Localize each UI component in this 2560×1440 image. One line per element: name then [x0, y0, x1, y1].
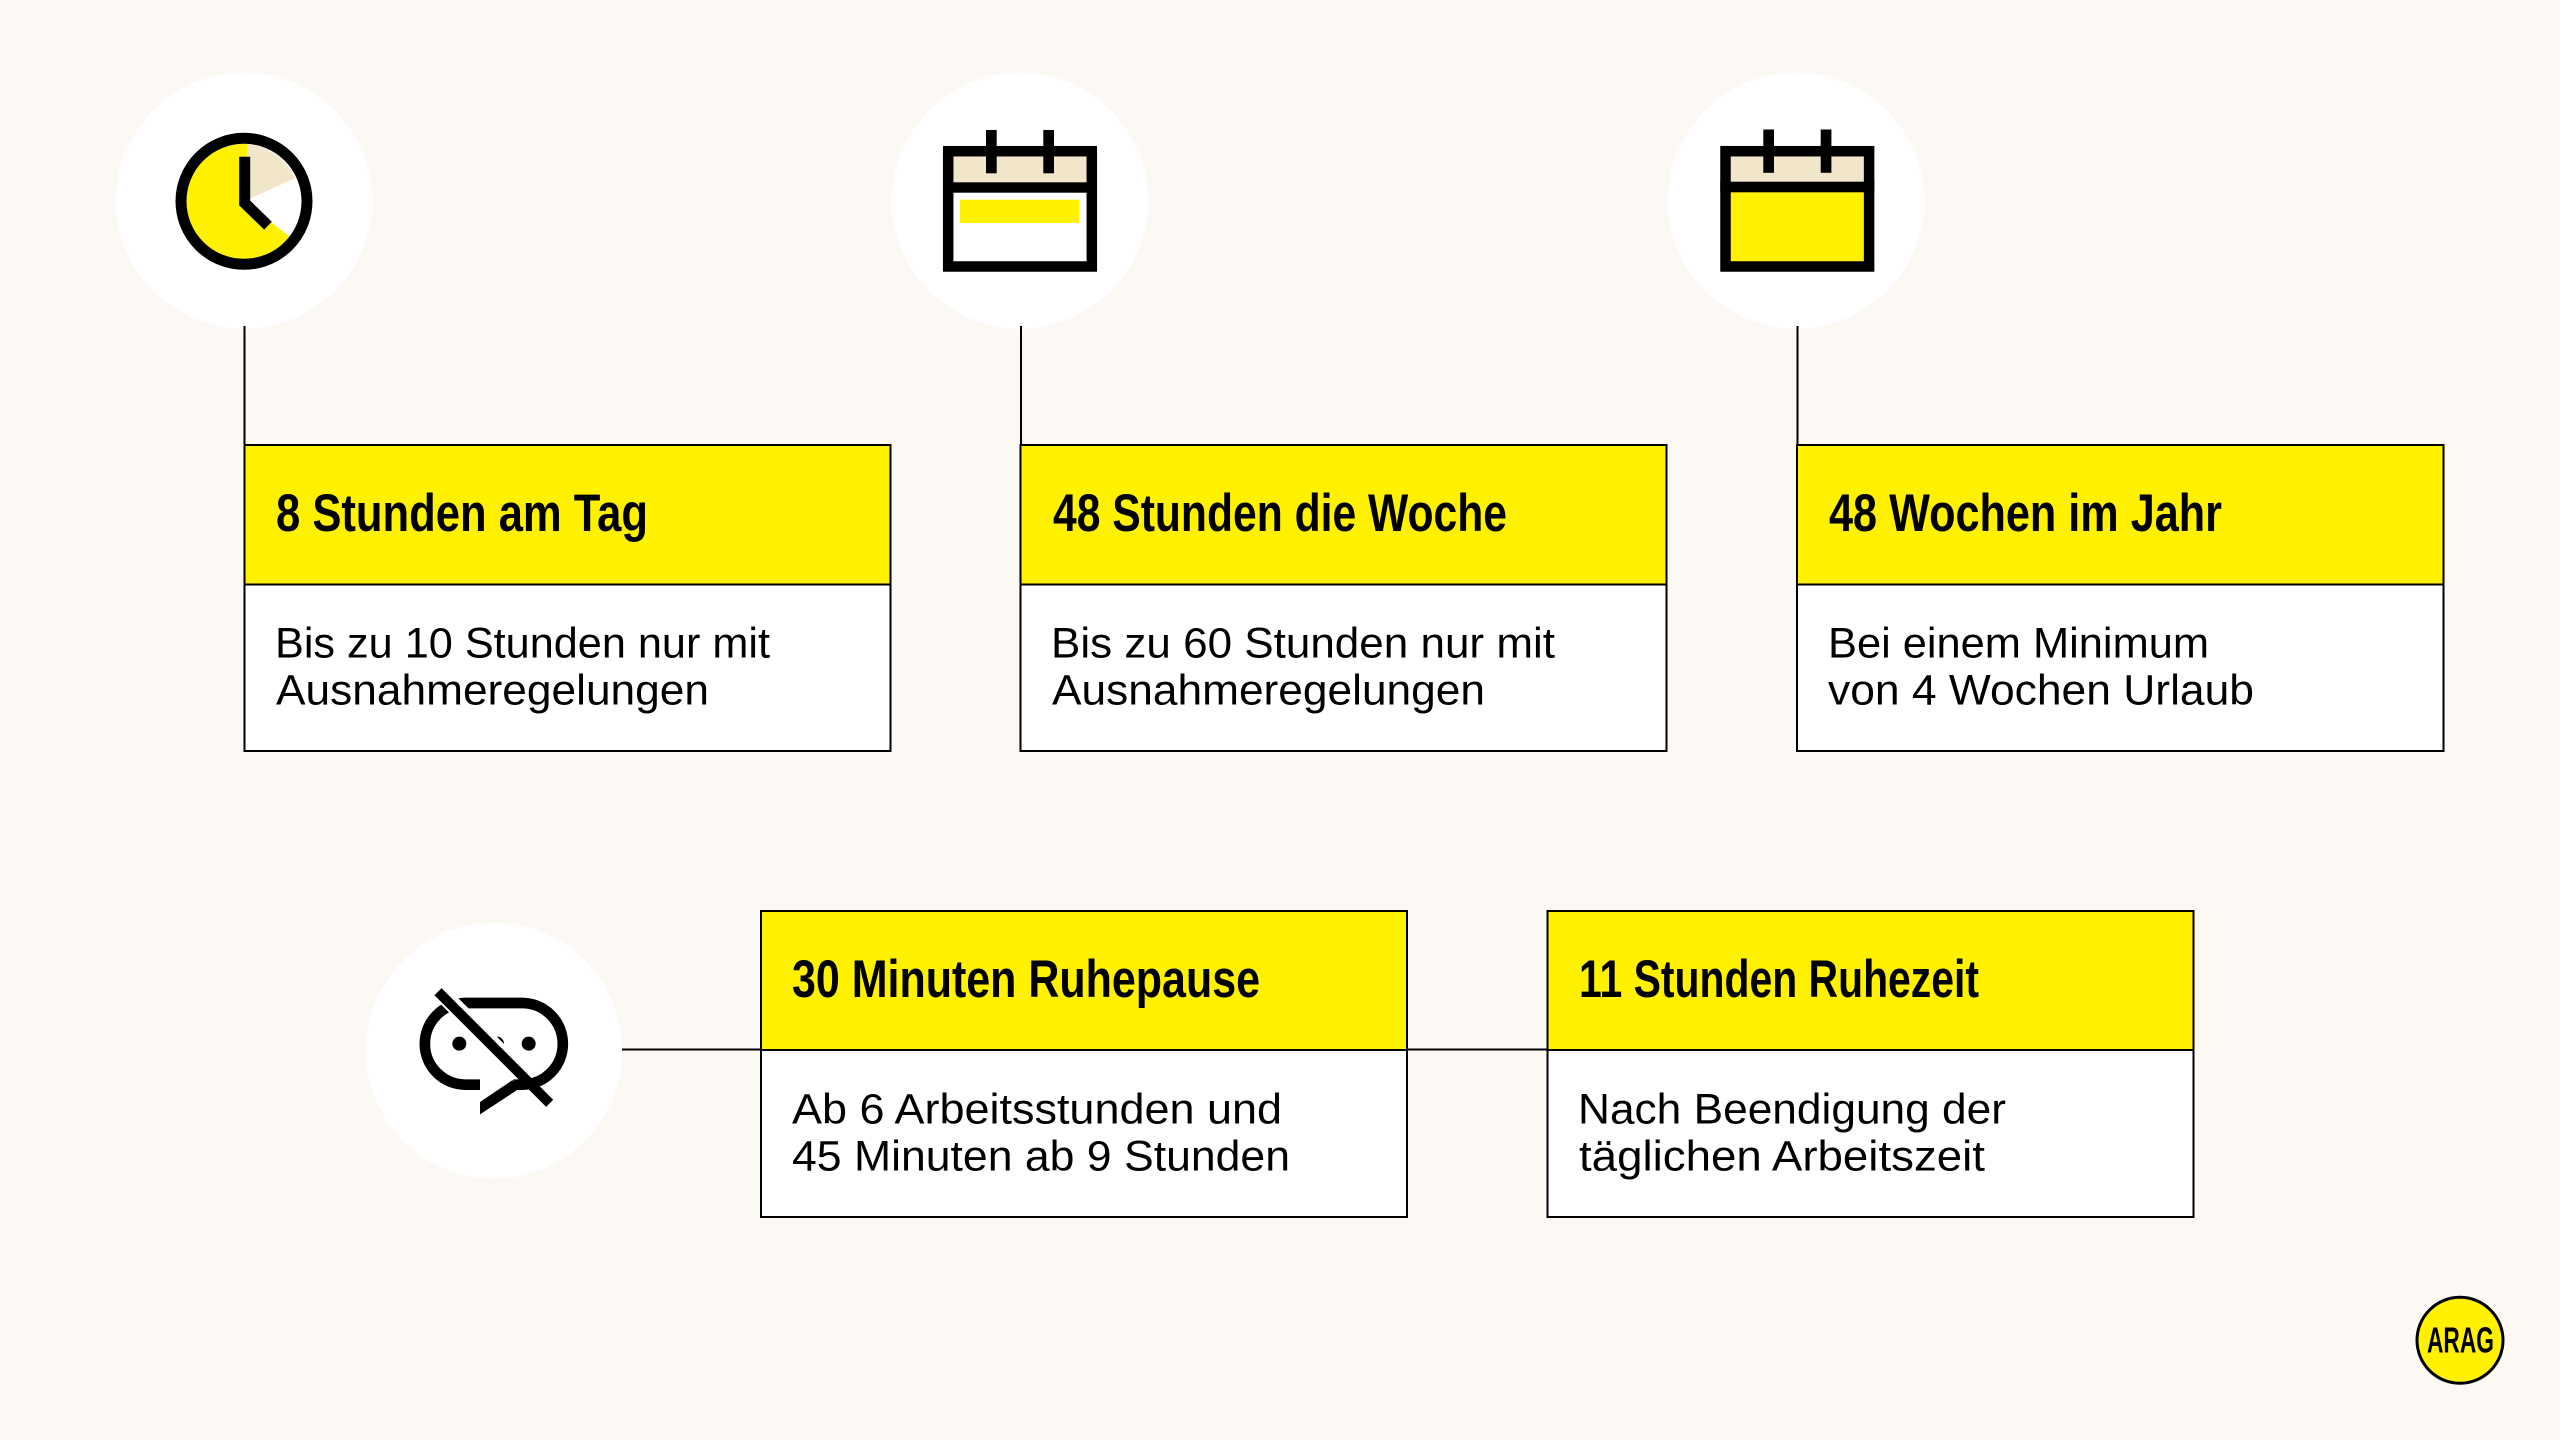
- icon: calendar with one highlighted row: [892, 73, 1148, 329]
- description: Ab 6 Arbeitsstunden und: [792, 1086, 1282, 1134]
- panel header: [1020, 445, 1666, 584]
- description: [792, 1086, 1290, 1180]
- panel: 11 Stunden Ruhezeit: [1548, 911, 2194, 1217]
- panel: 48 Wochen im Jahr: [1797, 445, 2444, 751]
- panel: 8 Stunden am Tag: [244, 445, 890, 751]
- description: Bis zu 10 Stunden nur mit: [275, 620, 770, 668]
- connector: calendar week to box 2: [1020, 326, 1022, 445]
- panel: 48 Stunden die Woche: [1020, 445, 1666, 751]
- connector: break icon to box 4: [622, 1048, 761, 1050]
- connector: calendar year to box 3: [1796, 326, 1798, 445]
- icon: crossed-out speech bubble: [366, 923, 622, 1179]
- description: täglichen Arbeitszeit: [1579, 1132, 1985, 1180]
- panel body: [1020, 445, 1666, 751]
- icon: calendar fully highlighted: [1668, 73, 1924, 329]
- panel body: [244, 445, 890, 751]
- connector: box 4 to box 5: [1407, 1048, 1548, 1050]
- logo: ARAG: [2417, 1297, 2503, 1383]
- description: [275, 620, 770, 714]
- panel header: [1548, 911, 2194, 1050]
- icon: clock: [116, 73, 372, 329]
- description: Ausnahmeregelungen: [276, 666, 709, 714]
- panel header: [244, 445, 890, 584]
- heading: 30 Minuten Ruhepause: [792, 950, 1260, 1009]
- description: Bei einem Minimum: [1828, 620, 2209, 668]
- heading: 48 Stunden die Woche: [1053, 484, 1507, 543]
- description: von 4 Wochen Urlaub: [1828, 666, 2254, 714]
- description: 45 Minuten ab 9 Stunden: [792, 1132, 1290, 1180]
- panel body: [1797, 445, 2444, 751]
- logo: ARAG: ARAG: [2427, 1320, 2494, 1361]
- description: Bis zu 60 Stunden nur mit: [1051, 620, 1555, 668]
- description: Ausnahmeregelungen: [1052, 666, 1485, 714]
- panel: 30 Minuten Ruhepause: [761, 911, 1407, 1217]
- panel header: [761, 911, 1407, 1050]
- description: [1578, 1086, 2006, 1180]
- panel header: [1797, 445, 2444, 584]
- panel body: [1548, 911, 2194, 1217]
- connector: clock to box 1: [244, 326, 246, 445]
- description: [1828, 620, 2254, 714]
- description: [1051, 620, 1555, 714]
- heading: 8 Stunden am Tag: [276, 484, 648, 543]
- panel body: [761, 911, 1407, 1217]
- description: Nach Beendigung der: [1578, 1086, 2006, 1134]
- heading: 48 Wochen im Jahr: [1829, 484, 2222, 543]
- heading: 11 Stunden Ruhezeit: [1579, 950, 1979, 1009]
